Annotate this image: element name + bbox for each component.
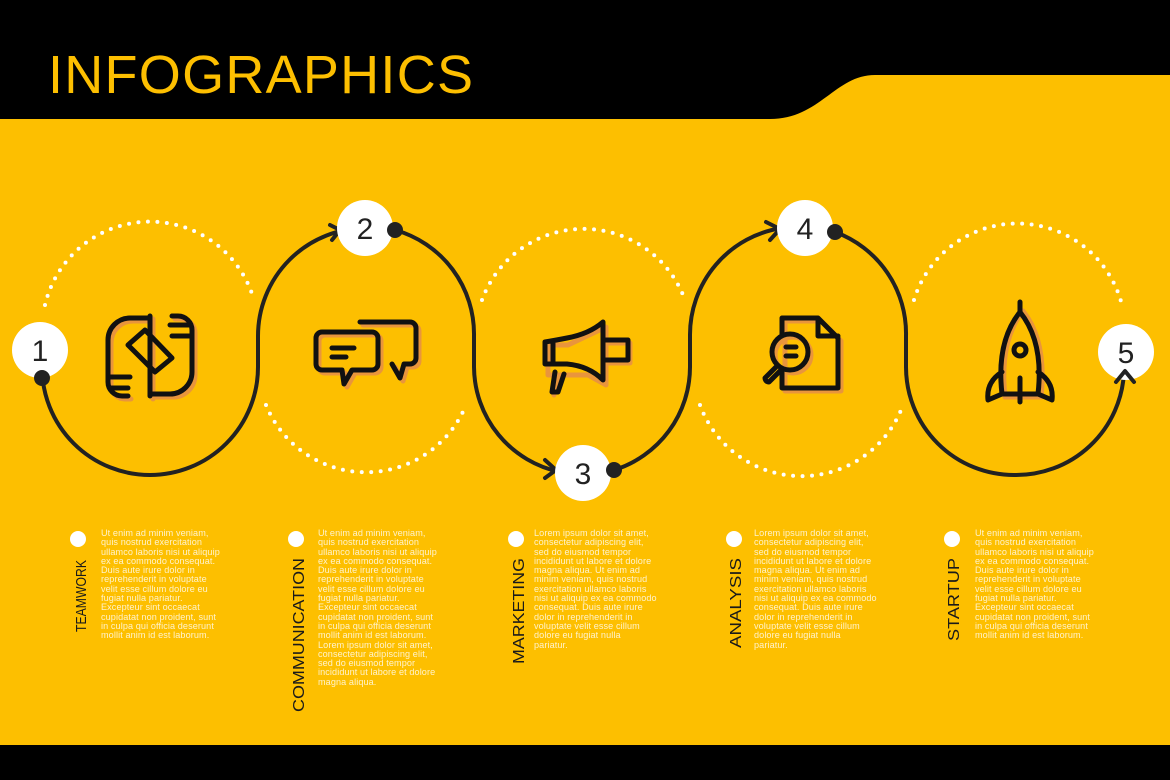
text: communication: Lorem ipsum dolor sit amet,	[318, 640, 433, 650]
text: marketing: pariatur.	[534, 640, 568, 650]
badge 1: 1	[32, 335, 48, 368]
text: communication: Duis aute irure dolor in	[318, 565, 412, 575]
text: teamwork: Ut enim ad minim veniam,	[101, 528, 209, 538]
label: MARKETING: MARKETING	[511, 558, 528, 664]
text: teamwork: ullamco laboris nisi ut aliquip	[101, 547, 220, 557]
text: analysis: dolor in reprehenderit in	[754, 612, 853, 622]
text: analysis: Lorem ipsum dolor sit amet,	[754, 528, 869, 538]
text: analysis: voluptate velit esse cillum	[754, 621, 860, 631]
text: analysis: incididunt ut labore et dolore	[754, 556, 871, 566]
icon: rocket	[988, 302, 1052, 402]
text: teamwork: quis nostrud exercitation	[101, 537, 202, 547]
label: STARTUP: STARTUP	[946, 558, 963, 641]
text: communication: quis nostrud exercitation	[318, 537, 419, 547]
text: marketing: dolore eu fugiat nulla	[534, 630, 621, 640]
text: communication: fugiat nulla pariatur.	[318, 593, 400, 603]
text: teamwork: ex ea commodo consequat.	[101, 556, 215, 566]
text: teamwork	[101, 528, 220, 640]
text: startup	[975, 528, 1094, 640]
text: startup: Excepteur sint occaecat	[975, 602, 1074, 612]
badge 5: 5	[1118, 337, 1134, 370]
arrow into badge 5	[1116, 371, 1134, 382]
text: communication: incididunt ut labore et dolore	[318, 667, 435, 677]
text: analysis: pariatur.	[754, 640, 788, 650]
text: marketing: consectetur adipiscing elit,	[534, 537, 643, 547]
text: teamwork: velit esse cillum dolore eu	[101, 584, 208, 594]
icon: megaphone	[545, 322, 630, 395]
text: analysis	[754, 528, 877, 650]
text: teamwork: Duis aute irure dolor in	[101, 565, 195, 575]
badge 2	[337, 200, 403, 256]
badge 3	[555, 445, 622, 501]
badge 2: 2	[357, 213, 373, 246]
text: analysis: consequat. Duis aute irure	[754, 602, 863, 612]
text: startup: velit esse cillum dolore eu	[975, 584, 1082, 594]
text: marketing: exercitation ullamco laboris	[534, 584, 646, 594]
text: teamwork: mollit anim id est laborum.	[101, 630, 209, 640]
text: startup: mollit anim id est laborum.	[975, 630, 1083, 640]
text: teamwork: cupidatat non proident, sunt	[101, 612, 216, 622]
text: marketing: consequat. Duis aute irure	[534, 602, 643, 612]
text: communication: ex ea commodo consequat.	[318, 556, 432, 566]
text: communication: velit esse cillum dolore eu	[318, 584, 425, 594]
text: analysis: consectetur adipiscing elit,	[754, 537, 863, 547]
text: marketing: minim veniam, quis nostrud	[534, 574, 647, 584]
text: communication: mollit anim id est laborum.	[318, 630, 426, 640]
text: teamwork: fugiat nulla pariatur.	[101, 593, 183, 603]
text: marketing: dolor in reprehenderit in	[534, 612, 633, 622]
text: startup: Ut enim ad minim veniam,	[975, 528, 1083, 538]
dotted arcs	[45, 222, 1122, 476]
text: communication: Ut enim ad minim veniam,	[318, 528, 426, 538]
text: analysis: minim veniam, quis nostrud	[754, 574, 867, 584]
text: teamwork: in culpa qui officia deserunt	[101, 621, 214, 631]
icon: analysis document	[765, 318, 841, 391]
text: teamwork: reprehenderit in voluptate	[101, 574, 207, 584]
label: TEAMWORK: TEAMWORK	[73, 560, 90, 632]
text: communication: sed do eiusmod tempor	[318, 658, 415, 668]
text: startup: Duis aute irure dolor in	[975, 565, 1069, 575]
label: ANALYSIS: ANALYSIS	[728, 558, 745, 648]
text: analysis: dolore eu fugiat nulla	[754, 630, 841, 640]
badge 5	[1098, 324, 1154, 380]
badge 3: 3	[575, 458, 591, 491]
text: analysis: magna aliqua. Ut enim ad	[754, 565, 860, 575]
label: COMMUNICATION: COMMUNICATION	[291, 558, 308, 712]
text: analysis: exercitation ullamco laboris	[754, 584, 866, 594]
text: startup: ullamco laboris nisi ut aliquip	[975, 547, 1094, 557]
text: communication: Excepteur sint occaecat	[318, 602, 417, 612]
text: marketing	[534, 528, 657, 650]
text: communication: in culpa qui officia deserunt	[318, 621, 431, 631]
text: marketing: sed do eiusmod tempor	[534, 547, 631, 557]
text: teamwork: Excepteur sint occaecat	[101, 602, 200, 612]
text: communication: cupidatat non proident, sunt	[318, 612, 433, 622]
text: communication: ullamco laboris nisi ut aliquip	[318, 547, 437, 557]
text: marketing: voluptate velit esse cillum	[534, 621, 640, 631]
icon: teamwork hands	[108, 316, 195, 399]
badge 4	[777, 200, 843, 256]
badge 4: 4	[797, 213, 813, 246]
text: analysis: nisi ut aliquip ex ea commodo	[754, 593, 877, 603]
text: marketing: incididunt ut labore et dolore	[534, 556, 651, 566]
text: marketing: nisi ut aliquip ex ea commodo	[534, 593, 657, 603]
text: communication: consectetur adipiscing elit,	[318, 649, 427, 659]
text: startup: ex ea commodo consequat.	[975, 556, 1089, 566]
text: marketing: Lorem ipsum dolor sit amet,	[534, 528, 649, 538]
bottom band	[0, 745, 1170, 780]
text: communication: reprehenderit in voluptate	[318, 574, 424, 584]
text: startup: in culpa qui officia deserunt	[975, 621, 1088, 631]
text: marketing: magna aliqua. Ut enim ad	[534, 565, 640, 575]
text: communication	[318, 528, 437, 687]
text: startup: fugiat nulla pariatur.	[975, 593, 1057, 603]
icon: chat bubbles	[316, 322, 419, 387]
text: startup: reprehenderit in voluptate	[975, 574, 1081, 584]
text: analysis: sed do eiusmod tempor	[754, 547, 851, 557]
text: startup: cupidatat non proident, sunt	[975, 612, 1090, 622]
bullet dots	[70, 531, 86, 547]
badge 1	[12, 322, 68, 386]
text: startup: quis nostrud exercitation	[975, 537, 1076, 547]
text: communication: magna aliqua.	[318, 677, 376, 687]
title: INFOGRAPHICS	[48, 45, 473, 105]
flow path	[42, 222, 1124, 478]
